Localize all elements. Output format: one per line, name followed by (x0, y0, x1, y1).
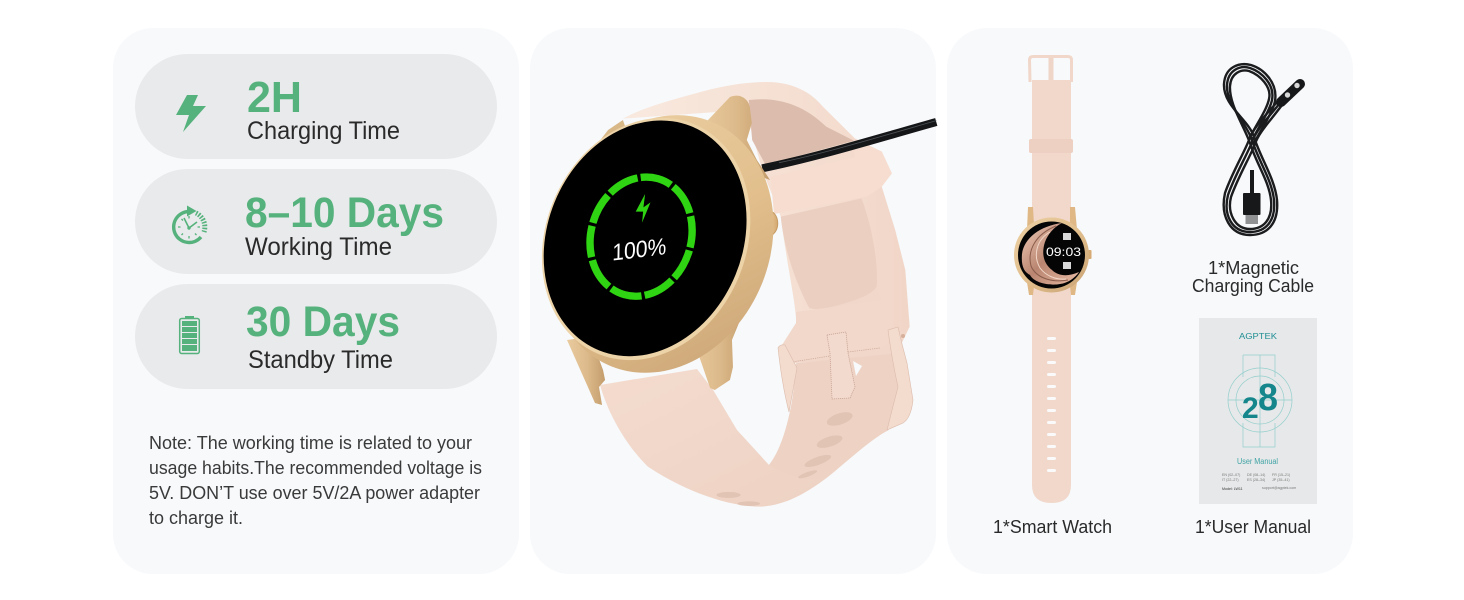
swirl watch face art (1022, 223, 1079, 285)
label: user manual: 1*User Manual (1195, 516, 1311, 537)
language index: JP (35–41) (1272, 478, 1290, 482)
upper left lug (583, 120, 631, 163)
buckle gap (853, 361, 862, 376)
watch crown (1088, 250, 1092, 259)
value: 30 days: 30 Days (246, 298, 400, 346)
panel: battery life (113, 28, 519, 574)
upper strap (623, 82, 910, 363)
watch screen (1018, 222, 1085, 288)
language index: FR (15–21) (1272, 473, 1290, 477)
charging cable (762, 121, 936, 168)
label: charging cable: 1*Magnetic (1208, 257, 1299, 278)
connector pins (1285, 83, 1300, 98)
band tongue (782, 300, 892, 363)
icon: lightning bolt (176, 95, 206, 132)
manual title: User Manual (1237, 457, 1278, 466)
language index: ES (28–34) (1247, 478, 1265, 482)
bezel rim (506, 87, 786, 391)
language index: Model: LW11 (1222, 487, 1243, 491)
buckle pin (1048, 58, 1054, 83)
battery ring (576, 165, 706, 308)
label: charging cable: Charging Cable (1192, 275, 1314, 296)
language index: IT (22–27) (1222, 478, 1239, 482)
band inner tone (769, 353, 900, 479)
magnetic connector (1281, 84, 1300, 102)
watch strap (1032, 80, 1071, 503)
panel: package contents (947, 28, 1353, 574)
strap keeper band (771, 139, 892, 214)
stat pill: standby time (135, 284, 497, 389)
manual numeral graphic (1242, 377, 1278, 425)
icon: clock with arrow (174, 206, 205, 242)
buckle assembly (778, 300, 913, 430)
value: 2H: 2H (247, 73, 302, 122)
usage note: 5V. DON’T use over 5V/2A power adapter (149, 482, 480, 503)
watch line drawing (1228, 355, 1292, 447)
icon: full battery (180, 316, 199, 354)
time readout: 09:03 (1046, 245, 1081, 259)
usb plug (1243, 193, 1260, 215)
strap buckle (1030, 56, 1072, 82)
language index (1222, 473, 1296, 491)
gold case body (511, 81, 812, 407)
item: charging cable (1224, 64, 1300, 235)
usage note: to charge it. (149, 507, 243, 528)
usb tip (1246, 215, 1258, 224)
left buckle frame (778, 345, 797, 412)
language index: DE (08–14) (1247, 473, 1265, 477)
black screen (509, 90, 781, 387)
usage note (149, 432, 482, 528)
strap holes (716, 409, 854, 506)
language index: support@agptek.com (1262, 486, 1296, 490)
right buckle frame (887, 327, 913, 430)
case lugs (1027, 207, 1077, 295)
top complication (1063, 233, 1071, 240)
brand logo: AGPTEK (1239, 331, 1277, 341)
plug lead (1250, 170, 1254, 194)
inner strap shadow (749, 99, 854, 165)
center loop (827, 332, 855, 399)
manual numeral graphic: 2 (1242, 392, 1259, 425)
stat pill: charging time (135, 54, 497, 159)
panel: charging watch photo (506, 28, 936, 574)
bottom complication (1063, 262, 1071, 269)
charge percentage: 100% (612, 233, 667, 266)
lower left lug (567, 337, 605, 405)
item: smart watch (1014, 56, 1092, 503)
manual numeral graphic: 8 (1258, 377, 1278, 419)
stat pill: working time (135, 169, 497, 274)
label: standby time: Standby Time (248, 346, 393, 374)
case bezel (1014, 218, 1089, 292)
usage note: Note: The working time is related to your (149, 432, 472, 453)
lower right lug (688, 303, 747, 390)
language index: EN (02–07) (1222, 473, 1240, 477)
item: user manual booklet (1199, 318, 1317, 504)
illustration: watch on charging cable (506, 81, 936, 507)
band lower body (789, 287, 895, 363)
strap keeper (1029, 139, 1073, 153)
buckle pin dot (901, 334, 905, 338)
strap soft panel (781, 198, 877, 310)
value: 8-10 days: 8–10 Days (245, 189, 444, 237)
label: charging time: Charging Time (247, 117, 400, 145)
label: smart watch: 1*Smart Watch (993, 516, 1112, 537)
upper right lug (698, 96, 770, 180)
coiled cord (1224, 64, 1282, 235)
front strap (600, 353, 902, 507)
tongue stitching (784, 346, 880, 362)
crown button (758, 211, 778, 236)
strap holes (1047, 337, 1056, 472)
label: charging cable (1192, 257, 1314, 296)
usage note: usage habits.The recommended voltage is (149, 457, 482, 478)
label: working time: Working Time (245, 233, 392, 261)
screen bolt (636, 194, 651, 223)
